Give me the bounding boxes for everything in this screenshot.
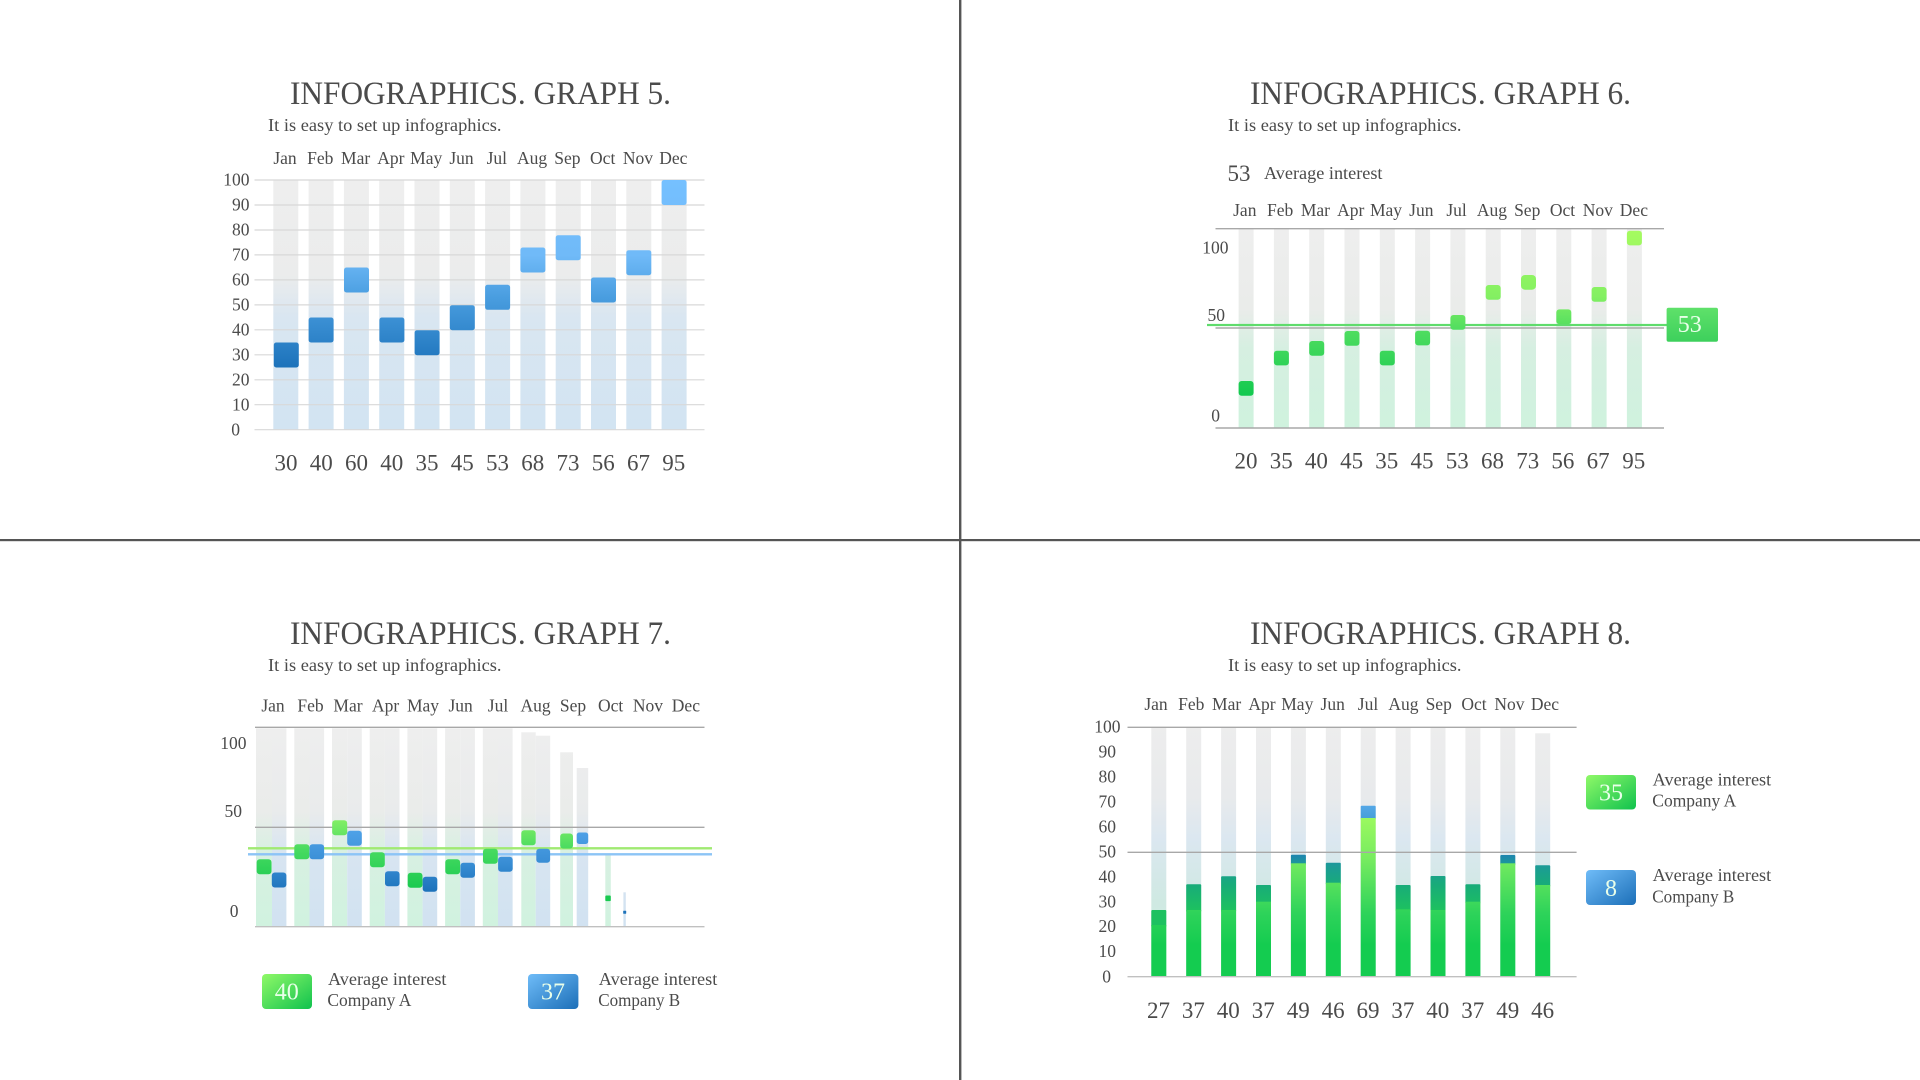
markers: graph 7 company B: [272, 831, 626, 914]
value labels: graph 5: 30: [274, 450, 298, 476]
y axis labels: graph 8: 20: [1098, 916, 1116, 936]
month labels: graph 8: Apr: [1248, 694, 1276, 714]
month labels: graph 5: Jun: [449, 148, 474, 168]
month labels: graph 5: Oct: [590, 148, 615, 168]
y axis labels: graph 8: 50: [1098, 841, 1116, 861]
markers: graph 6 monthly values: [1239, 231, 1642, 396]
month labels: graph 8: Mar: [1212, 694, 1241, 714]
stacked bars: company B portion: [1151, 806, 1550, 927]
value labels: graph 8: 40: [1426, 998, 1449, 1023]
month labels: graph 7: Jul: [488, 696, 508, 716]
subtitle: graph 5: It is easy to set up infographics.: [268, 115, 502, 135]
axis lines: graph 8: [1128, 727, 1577, 977]
month labels: graph 7: Jan: [261, 696, 285, 716]
legend: company A: 35: [1599, 780, 1623, 806]
value labels: graph 8: 37: [1182, 998, 1205, 1023]
y axis labels: graph 8: 60: [1098, 816, 1116, 836]
month labels: graph 8: Nov: [1494, 694, 1525, 714]
legend: company B: [1586, 865, 1771, 906]
y axis labels: graph 6: 0: [1211, 406, 1220, 426]
y axis labels: graph 5: [223, 170, 250, 439]
y axis labels: graph 7: [220, 733, 247, 921]
value labels: graph 6: 45: [1340, 448, 1363, 474]
month labels: graph 6: Nov: [1583, 200, 1613, 220]
legend: company A: Average interest: [1653, 770, 1771, 790]
month labels: graph 7: Oct: [598, 696, 623, 716]
month labels: graph 6: [1233, 200, 1648, 220]
legend: company B: [528, 969, 717, 1010]
y axis labels: graph 8: 10: [1098, 941, 1116, 961]
value labels: graph 6: [1234, 448, 1645, 474]
legend: company A: 40: [275, 980, 299, 1006]
month labels: graph 8: [1144, 694, 1559, 714]
value labels: graph 8: 46: [1531, 998, 1554, 1023]
legend: company B: Average interest: [1653, 865, 1771, 885]
month labels: graph 6: Aug: [1477, 200, 1507, 220]
grid lines: graph 5: [254, 180, 704, 430]
legend: company B: Average interest: [599, 969, 717, 989]
value labels: graph 5: 45: [451, 450, 474, 476]
month labels: graph 5: Mar: [341, 148, 370, 168]
value labels: graph 8: 37: [1461, 998, 1484, 1023]
y axis labels: graph 8: 40: [1098, 866, 1116, 886]
month labels: graph 5: Dec: [659, 148, 688, 168]
value labels: graph 6: 40: [1305, 448, 1328, 474]
month labels: graph 6: Oct: [1550, 200, 1575, 220]
y axis labels: graph 7: 0: [230, 901, 239, 921]
month labels: graph 7: Nov: [633, 696, 663, 716]
vertical divider: [959, 0, 961, 1080]
value labels: graph 6: 95: [1622, 448, 1645, 474]
y axis labels: graph 5: 20: [232, 370, 250, 390]
value labels: graph 5: 40: [310, 450, 333, 476]
average line: company A: [248, 847, 712, 850]
badge: graph 6 average: [1667, 308, 1718, 342]
value labels: graph 5: 53: [486, 450, 509, 476]
month labels: graph 8: Sep: [1426, 694, 1452, 714]
legend: company A: [262, 969, 447, 1010]
month labels: graph 7: Jun: [448, 696, 473, 716]
value labels: graph 6: 73: [1516, 448, 1539, 474]
bar chart: graph 5 background columns: [273, 180, 687, 430]
month labels: graph 6: May: [1370, 200, 1402, 220]
month labels: graph 7: May: [407, 696, 439, 716]
y axis labels: graph 5: 80: [232, 220, 250, 240]
month labels: graph 8: Dec: [1531, 694, 1559, 714]
month labels: graph 6: Mar: [1301, 200, 1330, 220]
month labels: graph 5: Sep: [554, 148, 581, 168]
month labels: graph 6: Jun: [1409, 200, 1434, 220]
month labels: graph 5: Aug: [517, 148, 547, 168]
y axis labels: graph 5: 0: [231, 420, 240, 440]
month labels: graph 7: Mar: [333, 696, 363, 716]
value labels: graph 6: 68: [1481, 448, 1504, 474]
month labels: graph 8: Jan: [1144, 694, 1168, 714]
legend: company B: 8: [1605, 876, 1617, 902]
legend: company B: Company B: [598, 990, 680, 1010]
bar chart: graph 6 background columns: [1239, 229, 1642, 428]
value labels: graph 8: 49: [1496, 998, 1519, 1023]
month labels: graph 5: Jan: [273, 148, 297, 168]
panel: graph 6: [1202, 76, 1718, 474]
month labels: graph 8: Feb: [1178, 694, 1205, 714]
value labels: graph 5: 40: [380, 450, 403, 476]
legend: company A: [1586, 770, 1771, 811]
legend: company B: Company B: [1652, 886, 1734, 906]
y axis labels: graph 8: [1094, 717, 1121, 986]
axis lines: graph 6: [1216, 229, 1664, 428]
y axis labels: graph 8: 100: [1094, 717, 1121, 737]
month labels: graph 5: Feb: [307, 148, 334, 168]
y axis labels: graph 8: 90: [1098, 742, 1116, 762]
month labels: graph 5: Apr: [377, 148, 405, 168]
month labels: graph 6: Dec: [1620, 200, 1648, 220]
subtitle: graph 8: It is easy to set up infographics.: [1228, 655, 1462, 675]
month labels: graph 6: Sep: [1514, 200, 1541, 220]
legend: company A: Company A: [1652, 791, 1737, 811]
month labels: graph 8: Oct: [1461, 694, 1487, 714]
value labels: graph 6: 45: [1410, 448, 1434, 474]
subtitle: graph 6: It is easy to set up infographics.: [1228, 115, 1462, 135]
title: graph 8: INFOGRAPHICS. GRAPH 8.: [1250, 616, 1631, 652]
y axis labels: graph 6: [1202, 237, 1229, 426]
month labels: graph 7: [261, 696, 700, 716]
y axis labels: graph 8: 30: [1098, 891, 1116, 911]
value labels: graph 8: 27: [1147, 998, 1170, 1023]
month labels: graph 6: Feb: [1267, 200, 1293, 220]
month labels: graph 8: Aug: [1388, 694, 1419, 714]
y axis labels: graph 8: 80: [1098, 767, 1116, 787]
legend: company A: Company A: [327, 990, 412, 1010]
month labels: graph 5: May: [410, 148, 442, 168]
value labels: graph 6: 35: [1375, 448, 1398, 474]
panel: graph 8: [1094, 616, 1771, 1023]
month labels: graph 7: Feb: [297, 696, 324, 716]
y axis labels: graph 5: 100: [223, 170, 250, 190]
month labels: graph 5: Jul: [487, 148, 507, 168]
y axis labels: graph 5: 10: [232, 394, 250, 414]
month labels: graph 7: Dec: [672, 696, 700, 716]
month labels: graph 8: Jun: [1321, 694, 1345, 714]
month labels: graph 6: Jan: [1233, 200, 1257, 220]
markers: graph 5 monthly values: [274, 180, 687, 368]
y axis labels: graph 5: 30: [232, 344, 250, 364]
title: graph 5: INFOGRAPHICS. GRAPH 5.: [290, 76, 671, 112]
y axis labels: graph 5: 90: [232, 195, 250, 215]
value labels: graph 5: 95: [662, 450, 685, 476]
bar chart: graph 7 company B columns: [272, 728, 626, 927]
bar chart: graph 7 company A columns: [256, 728, 611, 927]
panel: graph 5: [223, 76, 704, 476]
axis lines: graph 7: [255, 727, 704, 927]
bar chart: graph 8 background columns: [1151, 727, 1550, 977]
value labels: graph 5: 73: [556, 450, 580, 476]
value labels: graph 5: 35: [416, 450, 438, 476]
y axis labels: graph 8: 70: [1098, 792, 1116, 812]
month labels: graph 7: Sep: [560, 696, 586, 716]
value labels: graph 8: 49: [1287, 998, 1310, 1023]
y axis labels: graph 7: 100: [220, 733, 247, 753]
title: graph 6: INFOGRAPHICS. GRAPH 6.: [1250, 76, 1631, 112]
month labels: graph 5: Nov: [623, 148, 653, 168]
value labels: graph 6: 67: [1587, 448, 1610, 474]
y axis labels: graph 6: 100: [1202, 237, 1229, 257]
y axis labels: graph 5: 50: [232, 295, 250, 315]
y axis labels: graph 6: 50: [1208, 305, 1225, 325]
panel: graph 7: [220, 616, 717, 1010]
markers: graph 7 company A: [257, 820, 611, 901]
title: graph 7: INFOGRAPHICS. GRAPH 7.: [290, 616, 671, 652]
value labels: graph 6: 53: [1446, 448, 1469, 474]
average summary: graph 6: [1228, 161, 1383, 186]
y axis labels: graph 7: 50: [224, 801, 242, 821]
legend: company A: Average interest: [328, 969, 447, 989]
value labels: graph 8: 37: [1252, 998, 1275, 1023]
value labels: graph 6: 35: [1270, 448, 1293, 474]
month labels: graph 7: Aug: [521, 696, 551, 716]
y axis labels: graph 5: 70: [232, 245, 250, 265]
average line: graph 6: [1207, 324, 1667, 326]
average summary: graph 6: Average interest: [1264, 163, 1383, 183]
value labels: graph 5: 56: [592, 450, 615, 476]
average line: company B: [248, 853, 712, 856]
month labels: graph 5: [273, 148, 688, 168]
stacked bars: company A portion: [1151, 818, 1550, 977]
value labels: graph 5: [274, 450, 685, 476]
legend: company B: 37: [541, 980, 565, 1006]
value labels: graph 6: 56: [1551, 448, 1574, 474]
value labels: graph 5: 68: [521, 450, 544, 476]
badge: graph 6 average: 53: [1678, 312, 1702, 338]
horizontal divider: [0, 539, 1920, 541]
month labels: graph 7: Apr: [372, 696, 399, 716]
value labels: graph 8: 69: [1356, 998, 1380, 1023]
value labels: graph 8: 46: [1322, 998, 1345, 1023]
value labels: graph 5: 67: [627, 450, 650, 476]
value labels: graph 5: 60: [345, 450, 368, 476]
average summary: graph 6: 53: [1228, 161, 1250, 186]
month labels: graph 6: Jul: [1446, 200, 1467, 220]
month labels: graph 8: May: [1281, 694, 1314, 714]
value labels: graph 8: 40: [1217, 998, 1240, 1023]
y axis labels: graph 8: 0: [1102, 966, 1111, 986]
value labels: graph 8: 37: [1391, 998, 1414, 1023]
month labels: graph 8: Jul: [1358, 694, 1378, 714]
y axis labels: graph 5: 40: [232, 320, 250, 340]
value labels: graph 8: [1147, 998, 1554, 1023]
y axis labels: graph 5: 60: [232, 270, 250, 290]
value labels: graph 6: 20: [1234, 448, 1258, 474]
month labels: graph 6: Apr: [1337, 200, 1364, 220]
subtitle: graph 7: It is easy to set up infographics.: [268, 655, 502, 675]
